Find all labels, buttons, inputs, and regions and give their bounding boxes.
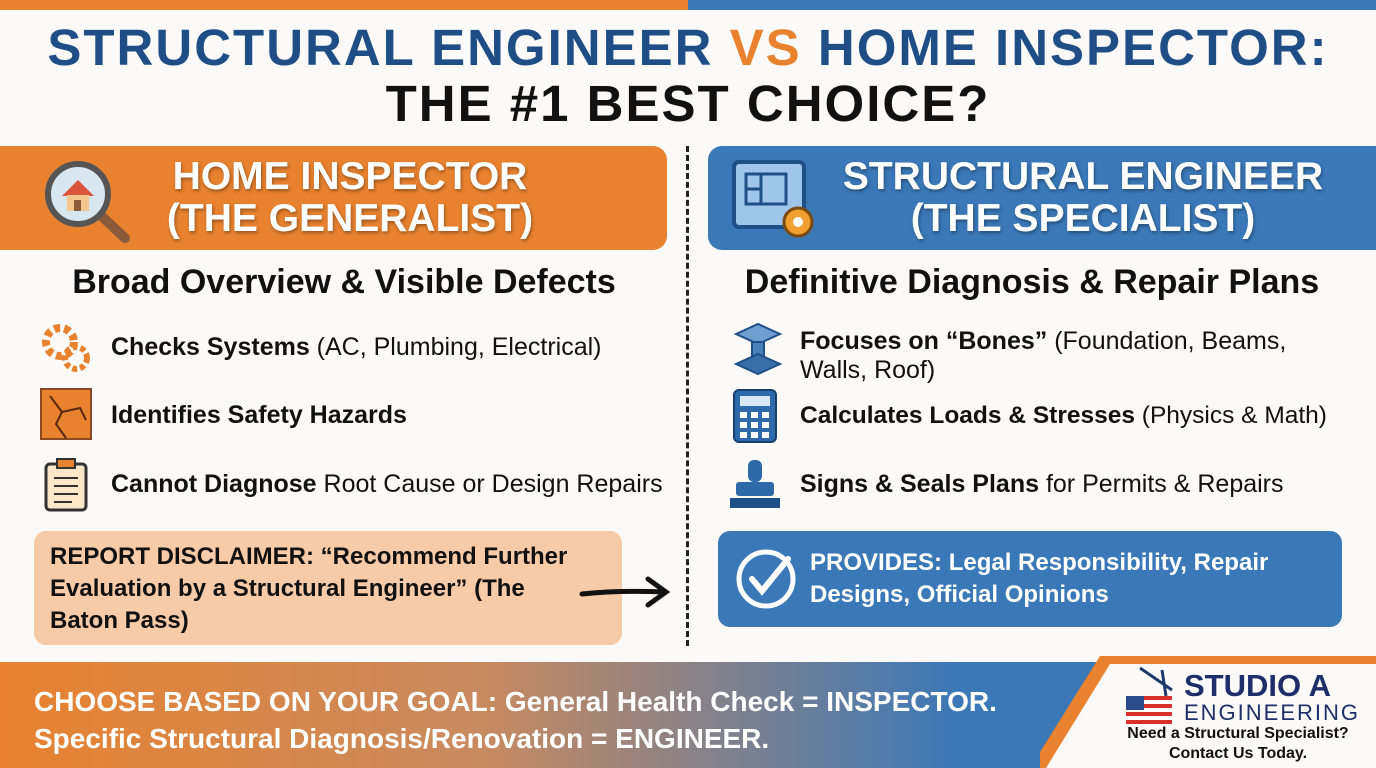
footer banner (0, 662, 1376, 768)
footer banner: CHOOSE BASED ON YOUR GOAL: General Health Check = INSPECTOR. (34, 686, 997, 717)
title: THE #1 BEST CHOICE? (386, 75, 990, 132)
panel: home inspector header: (THE GENERALIST) (167, 197, 533, 240)
subheading right: Definitive Diagnosis & Repair Plans (745, 263, 1319, 301)
item: calculates (733, 389, 1327, 443)
title (47, 19, 1329, 132)
callout: provides (718, 531, 1342, 627)
item: checks systems: Checks Systems (AC, Plumbing, Electrical) (111, 333, 601, 361)
panel: structural engineer header: (THE SPECIALIST) (911, 197, 1255, 240)
subheading left: Broad Overview & Visible Defects (72, 263, 616, 301)
item: signs seals: Signs & Seals Plans for Permits & Repairs (800, 470, 1284, 498)
panel: home inspector header: HOME INSPECTOR (173, 155, 527, 198)
arrow (580, 576, 670, 608)
callout: provides: PROVIDES: Legal Responsibility, Repair Designs, Official Opinions (810, 549, 1268, 608)
item: cannot diagnose (44, 458, 663, 512)
logo panel: Need a Structural Specialist? (1127, 725, 1349, 742)
item: calculates: Calculates Loads & Stresses (Physics & Math) (800, 402, 1327, 429)
panel: structural engineer header: STRUCTURAL ENGINEER (843, 155, 1323, 198)
callout: report disclaimer: REPORT DISCLAIMER: “Recommend Further Evaluation by a Structural Engineer” (The Baton Pass) (50, 543, 567, 634)
footer banner: Specific Structural Diagnosis/Renovation = ENGINEER. (34, 723, 769, 754)
logo panel: STUDIO A (1184, 668, 1331, 703)
list right (730, 322, 1327, 508)
item: bones: Focuses on “Bones” (Foundation, Beams, Walls, Roof) (800, 327, 1286, 384)
panel: structural engineer header (708, 146, 1376, 250)
item: cannot diagnose: Cannot Diagnose Root Cause or Design Repairs (111, 470, 663, 498)
item: safety hazards (40, 388, 407, 440)
logo panel: Contact Us Today. (1169, 745, 1307, 762)
divider dashed (686, 146, 689, 646)
logo panel (1040, 656, 1376, 768)
icon: check (736, 550, 796, 608)
list left (40, 324, 663, 512)
item: checks systems (42, 324, 601, 372)
icon: flag building (1126, 666, 1173, 724)
logo panel: ENGINEERING (1184, 700, 1360, 725)
icon: blueprint gear (732, 160, 814, 238)
item: safety hazards: Identifies Safety Hazards (111, 401, 407, 429)
icon: magnifier house (45, 161, 130, 243)
panel: home inspector header (0, 146, 667, 250)
item: signs seals (730, 460, 1284, 508)
title: STRUCTURAL ENGINEER VS HOME INSPECTOR: (47, 19, 1329, 76)
